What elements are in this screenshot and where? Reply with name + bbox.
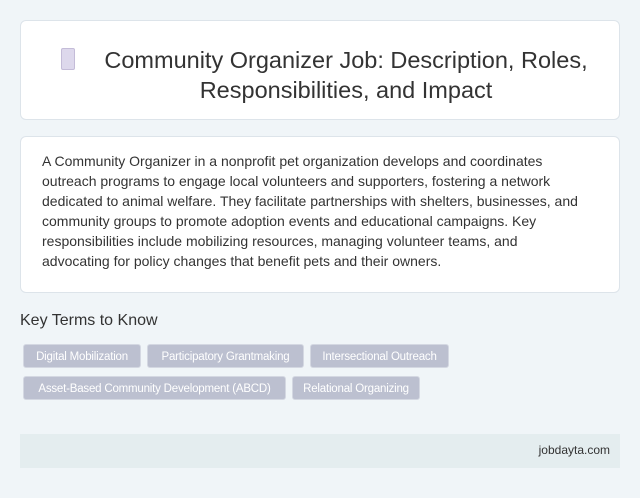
footer text: jobdayta.com bbox=[539, 443, 610, 457]
tag: Participatory Grantmaking bbox=[162, 351, 289, 363]
description card bbox=[20, 136, 620, 293]
tag bbox=[292, 376, 420, 400]
heading: key terms: Key Terms to Know bbox=[20, 312, 158, 329]
tag: Digital Mobilization bbox=[36, 351, 128, 363]
description text: A Community Organizer in a nonprofit pet organization develops and coordinates outreach programs to engage local volunteers and supporters, fostering a network dedicated to animal welfare. They facilitate partnerships with shelters, businesses, and community groups to promote adoption events and educational campaigns. Key responsibilities include mobilizing resources, managing volunteer teams, and advocating for policy changes that benefit pets and their owners. bbox=[42, 153, 578, 269]
tag: Asset-Based Community Development (ABCD) bbox=[38, 383, 271, 395]
footer bbox=[20, 434, 620, 468]
icon: document bbox=[61, 48, 75, 70]
title: Community Organizer Job: Description, Roles, Responsibilities, and Impact bbox=[104, 47, 588, 103]
tags bbox=[23, 344, 449, 400]
tag: Intersectional Outreach bbox=[322, 351, 437, 363]
tag bbox=[310, 344, 449, 368]
tag bbox=[147, 344, 304, 368]
tag bbox=[23, 376, 286, 400]
tag: Relational Organizing bbox=[303, 383, 409, 395]
title card bbox=[20, 20, 620, 120]
tag bbox=[23, 344, 141, 368]
